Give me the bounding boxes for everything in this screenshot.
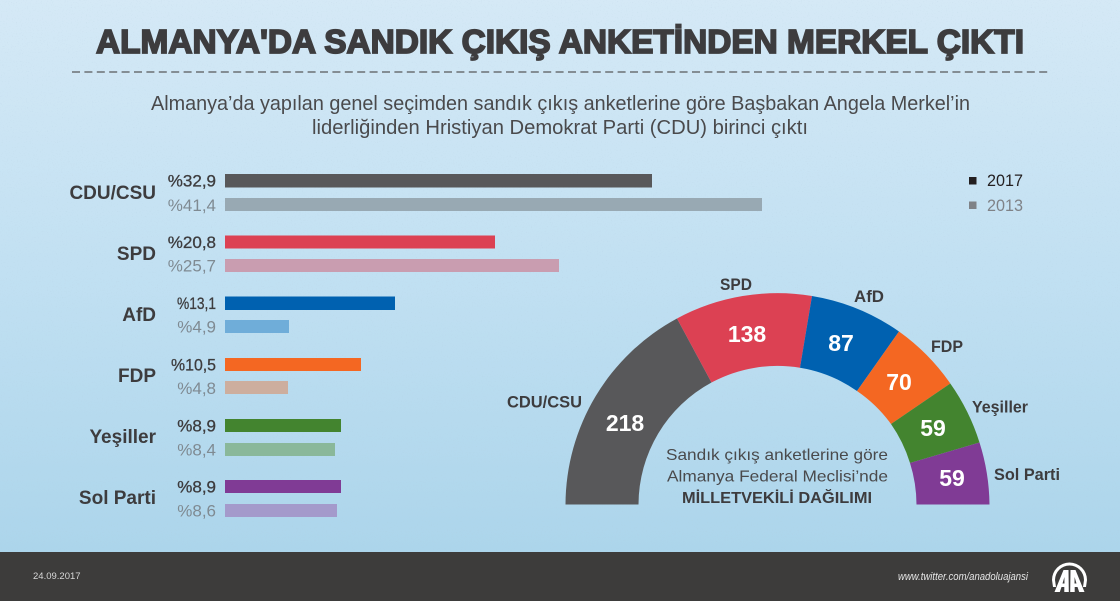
icon: Anadolu Agency logo	[1052, 562, 1087, 592]
row: Yeşiller	[89, 416, 341, 460]
segment: SPD 138	[677, 293, 812, 382]
segment: Sol Parti 59: 59	[939, 465, 965, 491]
segment: AfD 87: 87	[828, 330, 854, 356]
row: CDU/CSU	[69, 172, 762, 215]
row: FDP	[118, 356, 361, 398]
subtitle: Almanya’da yapılan genel seçimden sandık çıkış anketlerine göre Başbakan Angela Merkel’in	[151, 93, 970, 115]
row: Sol Parti: %8,6	[177, 502, 216, 520]
segment: Yeşiller 59: 59	[920, 415, 946, 441]
footer bar	[0, 552, 1120, 601]
row: Yeşiller: Yeşiller	[89, 427, 157, 448]
seat chart party labels: SPD	[720, 275, 752, 294]
legend	[969, 171, 1023, 215]
row: AfD: %4,9	[177, 318, 216, 336]
segment: FDP 70: 70	[886, 369, 912, 395]
segment: AfD 87	[800, 296, 899, 391]
row: SPD	[117, 233, 559, 276]
segment: SPD 138: 138	[728, 321, 766, 347]
row: Sol Parti: %8,9	[177, 478, 216, 496]
parliament seat chart	[507, 275, 1060, 507]
row: FDP: FDP	[118, 366, 156, 387]
row: SPD: %25,7	[168, 256, 216, 276]
row: AfD	[122, 294, 395, 336]
row: CDU/CSU: CDU/CSU	[69, 183, 156, 204]
legend: 2017	[987, 171, 1023, 190]
twitter url: www.twitter.com/anadoluajansi	[898, 571, 1028, 583]
row: AfD: %13,1	[177, 294, 216, 313]
segment: Yeşiller 59	[891, 384, 980, 463]
bar chart: vote share by party	[69, 172, 762, 520]
subtitle	[151, 93, 970, 139]
row: FDP: %10,5	[171, 356, 216, 374]
seat chart caption	[666, 447, 888, 507]
title: ALMANYA'DA SANDIK ÇIKIŞ ANKETİNDEN MERKEL ÇIKTI	[96, 23, 1024, 60]
segment: FDP 70	[857, 332, 950, 424]
segment: Sol Parti 59	[910, 442, 990, 504]
seat chart caption: MİLLETVEKİLİ DAĞILIMI	[682, 488, 872, 507]
seat chart caption: Sandık çıkış anketlerine göre	[666, 447, 888, 464]
row: CDU/CSU: %41,4	[168, 196, 216, 215]
seat chart party labels: AfD	[854, 287, 884, 306]
seat chart caption: Almanya Federal Meclisi’nde	[667, 468, 888, 486]
subtitle: liderliğinden Hristiyan Demokrat Parti (CDU) birinci çıktı	[312, 117, 808, 139]
row: Yeşiller: %8,9	[177, 416, 216, 436]
row: CDU/CSU: %32,9	[168, 172, 216, 190]
seat chart party labels	[507, 275, 1060, 484]
seat chart party labels: Sol Parti	[994, 465, 1060, 484]
seat chart party labels: Yeşiller	[972, 398, 1028, 416]
seat chart party labels: CDU/CSU	[507, 392, 582, 412]
legend: 2013	[987, 196, 1023, 215]
row: Sol Parti	[79, 478, 341, 520]
row: SPD: %20,8	[168, 233, 216, 252]
segment: CDU/CSU 218: 218	[606, 410, 644, 436]
segment: CDU/CSU 218	[566, 318, 712, 504]
row: FDP: %4,8	[177, 379, 216, 398]
row: Sol Parti: Sol Parti	[79, 488, 156, 509]
row: SPD: SPD	[117, 244, 156, 265]
date: 24.09.2017	[33, 571, 81, 582]
row: AfD: AfD	[122, 305, 156, 326]
row: Yeşiller: %8,4	[177, 440, 216, 460]
seat chart party labels: FDP	[931, 337, 963, 356]
